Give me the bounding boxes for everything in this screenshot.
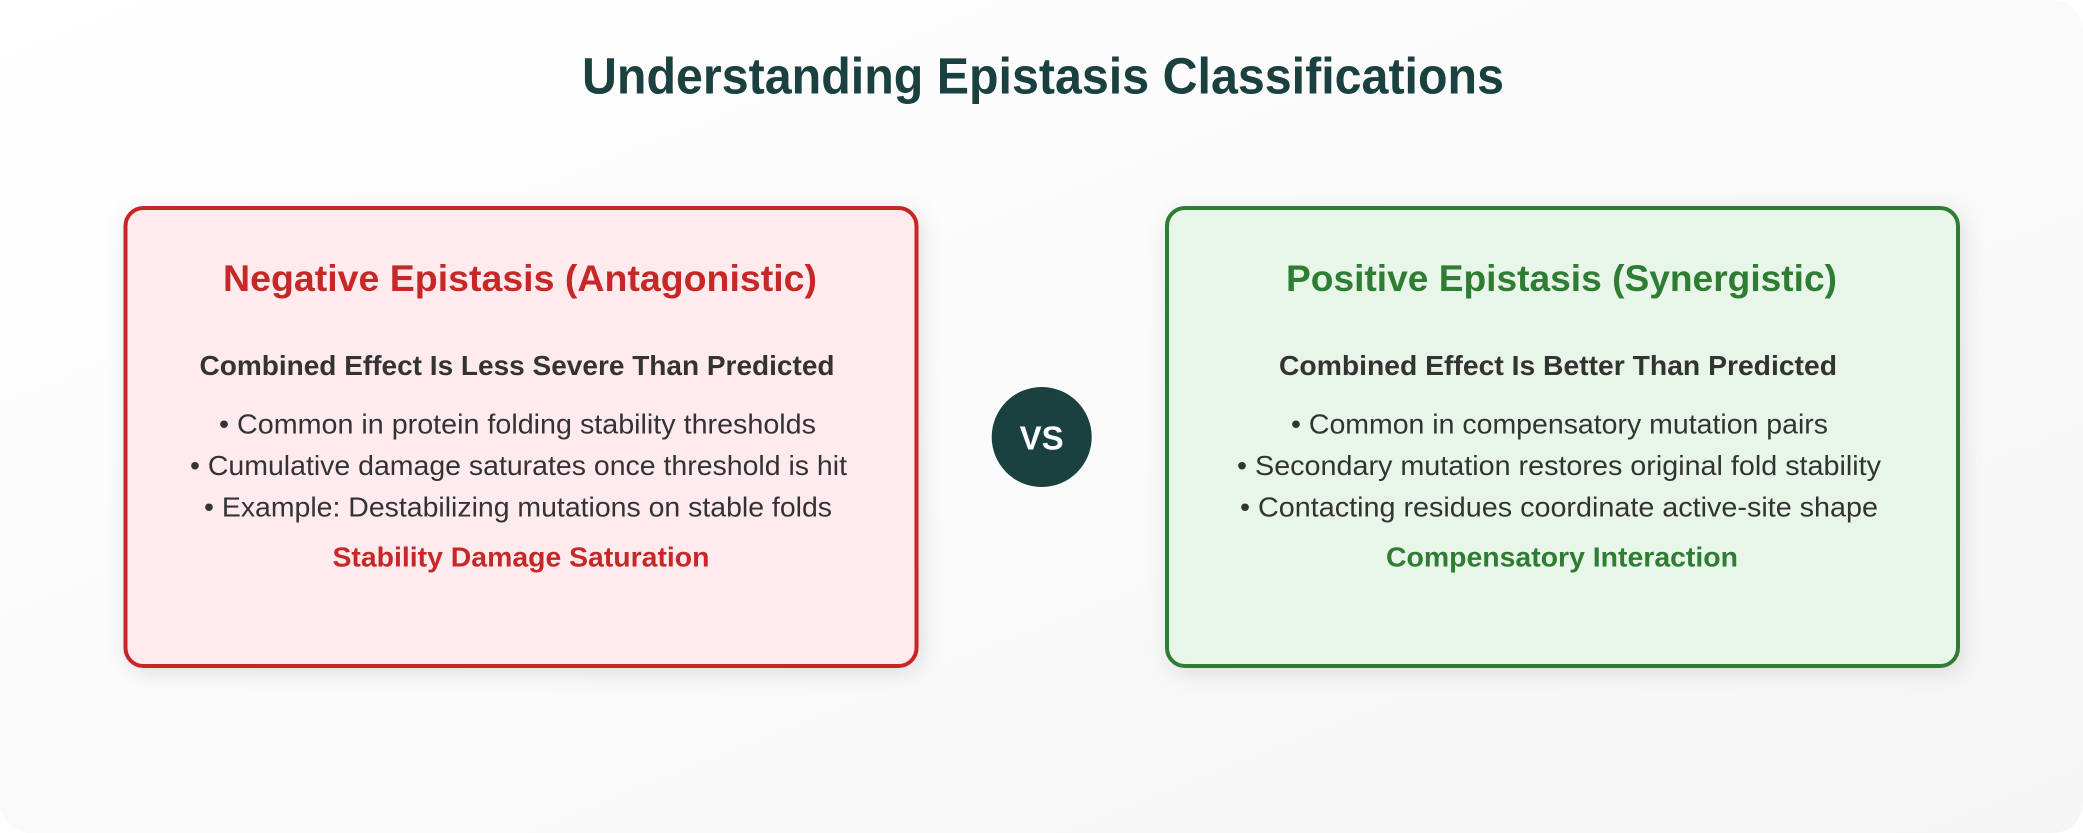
panel box: positive	[1167, 208, 1958, 666]
vs badge	[992, 387, 1092, 487]
bullet list: negative	[190, 408, 847, 523]
title: Understanding Epistasis Classifications	[582, 48, 1504, 104]
bullet list: positive: • Contacting residues coordinate active-site shape	[1240, 492, 1878, 523]
panel: positive epistasis	[1167, 208, 1958, 666]
panel: negative epistasis	[126, 208, 916, 666]
bullet list: negative: • Cumulative damage saturates once threshold is hit	[190, 450, 847, 481]
vs badge: VS	[1020, 419, 1064, 456]
bullet list: negative: • Common in protein folding stability thresholds	[219, 408, 816, 439]
heading: positive epistasis: Positive Epistasis (Synergistic)	[1286, 258, 1837, 299]
bullet list: positive: • Common in compensatory mutation pairs	[1291, 408, 1828, 439]
footer label: positive: Compensatory Interaction	[1386, 542, 1738, 573]
bullet list: positive: • Secondary mutation restores original fold stability	[1237, 450, 1881, 481]
bullet list: positive	[1237, 408, 1881, 523]
subheading: negative: Combined Effect Is Less Severe Than Predicted	[200, 350, 835, 381]
panel box: negative	[126, 208, 916, 666]
subheading: positive: Combined Effect Is Better Than Predicted	[1279, 350, 1837, 381]
bullet list: negative: • Example: Destabilizing mutations on stable folds	[204, 492, 832, 523]
footer label: negative: Stability Damage Saturation	[332, 542, 710, 573]
heading: negative epistasis: Negative Epistasis (Antagonistic)	[223, 258, 817, 299]
